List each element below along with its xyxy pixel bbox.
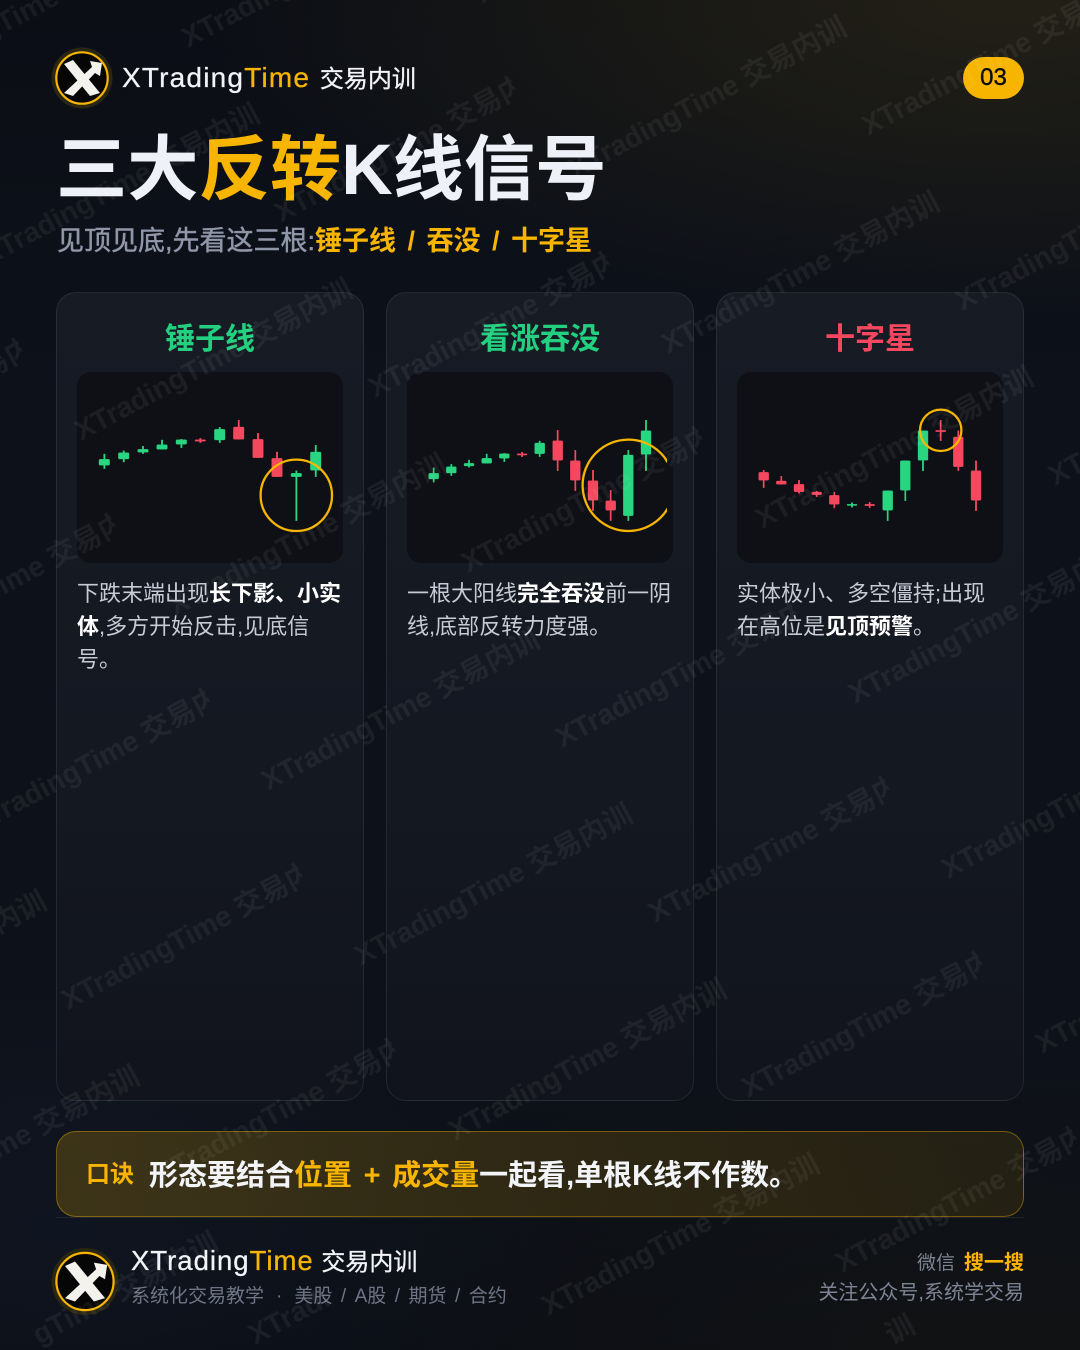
highlight circle: bullish engulfing: [583, 440, 674, 531]
callout text: 形态要结合位置 + 成交量一起看,单根K线不作数。: [149, 1160, 798, 1192]
title: 三大反转K线信号: [56, 130, 607, 210]
watermark layer: XTradingTime 交易内训: [656, 186, 945, 360]
watermark layer: XTradi: [243, 1282, 335, 1350]
header brand name: XTradingTime 交易内训: [122, 62, 416, 93]
description: bullish engulfing: 一根大阳线完全吞没前一阴线,底部反转力度强。: [407, 581, 671, 639]
panel: hammer: [56, 292, 364, 1101]
watermark layer: XTradingTime 交易内训: [550, 580, 839, 754]
panel heading: doji: 十字星: [825, 323, 915, 356]
candlestick chart: hammer: [77, 372, 343, 563]
watermark layer: XTradingTime 交易内训: [736, 930, 1025, 1104]
highlight circle: doji: [920, 410, 961, 451]
watermark layer: XTradingTime 交易内训: [256, 623, 545, 797]
footer tagline: 系统化交易教学 · 美股 / A股 / 期货 / 合约: [131, 1286, 507, 1307]
highlight circle: hammer: [261, 460, 332, 531]
watermark layer: XTradingTime 交易内训: [536, 1148, 825, 1322]
footer wechat search: 微信 搜一搜: [917, 1252, 1024, 1274]
footer logo: [52, 1248, 118, 1315]
issue badge: [963, 57, 1024, 99]
candlestick chart: doji: [737, 372, 1003, 563]
watermark layer: XTradingTime 交易内训: [349, 798, 638, 972]
panel heading: hammer: 锤子线: [165, 323, 255, 356]
watermark layer: XTradingTime 交易内训: [363, 230, 652, 404]
watermark layer: gTime 交易内训: [27, 1227, 224, 1350]
watermark layer: XTradingTime 交易内训: [750, 361, 1039, 535]
panel: bullish engulfing: [386, 292, 694, 1101]
footer brand name: XTradingTime 交易内训: [131, 1245, 417, 1276]
panel: doji: [716, 292, 1024, 1101]
watermark layer: XTradingTime 交易内训: [563, 11, 852, 185]
callout label: 口诀: [86, 1161, 134, 1188]
watermark layer: XTradingTime 交易内训: [643, 755, 932, 929]
callout: mnemonic: [56, 1131, 1024, 1217]
issue badge: 03: [980, 64, 1007, 91]
description: doji: 实体极小、多空僵持;出现在高位是见顶预警。: [737, 581, 985, 639]
subtitle: 见顶见底,先看这三根:锤子线 / 吞没 / 十字星: [57, 226, 592, 256]
watermark layer: XTradingTime 交易内训: [149, 1017, 438, 1191]
watermark layer: XTradingTime 交易内训: [56, 842, 345, 1016]
watermark layer: XTradingTime 交易内训: [163, 448, 452, 622]
watermark layer: 训: [880, 1310, 920, 1350]
watermark layer: XTradingTime 交易内训: [456, 405, 745, 579]
header logo: [52, 48, 112, 108]
candlestick chart: bullish engulfing: [407, 372, 673, 563]
description: hammer: 下跌末端出现长下影、小实体,多方开始反击,见底信号。: [77, 581, 341, 672]
watermark layer: XTradingTime 交易内训: [443, 973, 732, 1147]
watermark layer: XTradingTime 交易内训: [269, 55, 558, 229]
footer follow note: 关注公众号,系统学交易: [818, 1282, 1024, 1304]
watermark layer: XTradingTime 交易内训: [69, 273, 358, 447]
panel heading: bullish engulfing: 看涨吞没: [480, 323, 600, 356]
